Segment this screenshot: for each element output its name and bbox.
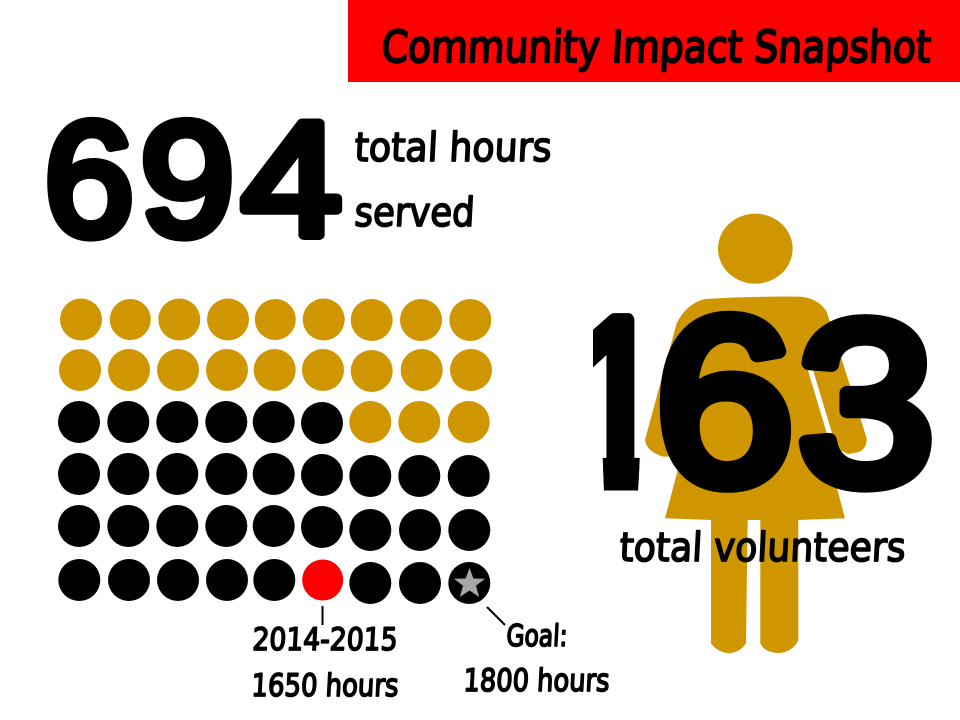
icon: woman figure bbox=[645, 214, 867, 653]
label: 2014-2015 1650 hours bbox=[251, 622, 399, 704]
hours total number bbox=[44, 89, 342, 270]
title banner bbox=[348, 0, 960, 82]
pointer: goal bbox=[487, 607, 505, 625]
volunteers total number: 3 bbox=[797, 274, 935, 532]
pointer: 2014-2015 bbox=[322, 606, 324, 625]
hours label: served bbox=[353, 190, 476, 236]
label: 2014-2015 1650 hours: 1650 hours bbox=[251, 668, 399, 704]
red dot: 2014-2015 marker bbox=[302, 560, 343, 600]
hours total number: 9 bbox=[140, 90, 235, 270]
volunteers total number: 6 bbox=[655, 269, 794, 533]
gold dots: hours served bbox=[59, 298, 492, 443]
label: goal 1800 hours: Goal: bbox=[506, 619, 568, 654]
icon: goal star bbox=[454, 568, 485, 597]
label: goal 1800 hours: 1800 hours bbox=[463, 663, 610, 699]
label: 2014-2015 1650 hours: 2014-2015 bbox=[252, 622, 398, 658]
hours total number: 4 bbox=[241, 89, 342, 270]
hours label bbox=[353, 125, 553, 236]
volunteers total number: 1 bbox=[566, 269, 668, 533]
black dots: remaining hours bbox=[58, 401, 490, 604]
dot grid: hours progress toward goal bbox=[58, 298, 492, 604]
volunteers label: total volunteers bbox=[618, 525, 907, 571]
label: goal 1800 hours bbox=[463, 619, 610, 699]
volunteers total number bbox=[593, 310, 932, 493]
hours label: total hours bbox=[353, 125, 553, 171]
hours total number: 6 bbox=[44, 89, 134, 270]
